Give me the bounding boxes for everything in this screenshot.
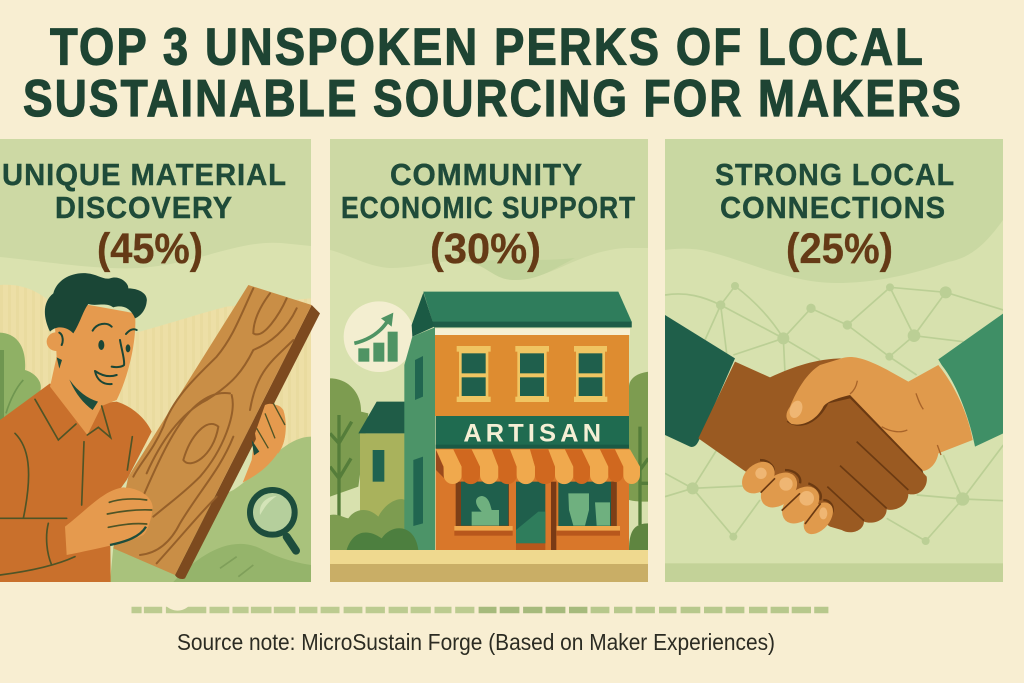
- trees and neighbouring house: [330, 372, 648, 550]
- ground: [330, 550, 648, 582]
- icon: magnifying glass: [250, 490, 296, 551]
- light hand: [786, 357, 973, 473]
- left sleeve: [665, 315, 735, 447]
- heading: strong local connections: STRONG LOCAL: [715, 157, 955, 192]
- wood plank: [113, 285, 320, 579]
- heading: community economic support: (30%): [430, 225, 541, 273]
- heading: community economic support: COMMUNITY: [390, 157, 583, 192]
- dark hand: [698, 358, 927, 532]
- source note: Source note: MicroSustain Forge (Based on Maker Experiences): [177, 629, 775, 655]
- title: [23, 18, 963, 128]
- shop windows and door: [454, 482, 620, 550]
- heading: unique material discovery: [2, 157, 287, 273]
- illustration: handshake over network: [665, 282, 1003, 582]
- head and neck: [45, 273, 147, 435]
- heading: community economic support: ECONOMIC SUPPORT: [341, 190, 636, 225]
- back hand: [243, 405, 286, 483]
- upper windows: [457, 346, 607, 402]
- shirt: [0, 383, 152, 582]
- heading: unique material discovery: DISCOVERY: [55, 190, 233, 225]
- illustration: artisan storefront: [330, 292, 648, 582]
- shop sign: [436, 416, 629, 449]
- panel: strong local connections: [665, 139, 1003, 582]
- heading: strong local connections: (25%): [786, 225, 893, 273]
- front hand: [65, 487, 153, 555]
- title: TOP 3 UNSPOKEN PERKS OF LOCAL: [50, 18, 925, 76]
- heading: community economic support: [341, 157, 636, 273]
- awning: [436, 449, 640, 484]
- heading: strong local connections: [715, 157, 955, 273]
- dashed progress bar: [132, 605, 828, 611]
- panel: community economic support: [330, 139, 648, 582]
- fingers: [742, 458, 834, 534]
- back hand fingers: [252, 403, 285, 455]
- panel: unique material discovery: [0, 139, 320, 582]
- network lines: [665, 282, 1003, 545]
- building: [347, 292, 640, 550]
- illustration: maker holding wood plank: [0, 273, 320, 582]
- icon: growth chart: [344, 301, 414, 372]
- heading: strong local connections: CONNECTIONS: [720, 190, 946, 225]
- right sleeve: [938, 313, 1003, 447]
- shop sign: ARTISAN: [463, 420, 601, 448]
- heading: unique material discovery: (45%): [97, 225, 203, 273]
- heading: unique material discovery: UNIQUE MATERIAL: [2, 157, 287, 192]
